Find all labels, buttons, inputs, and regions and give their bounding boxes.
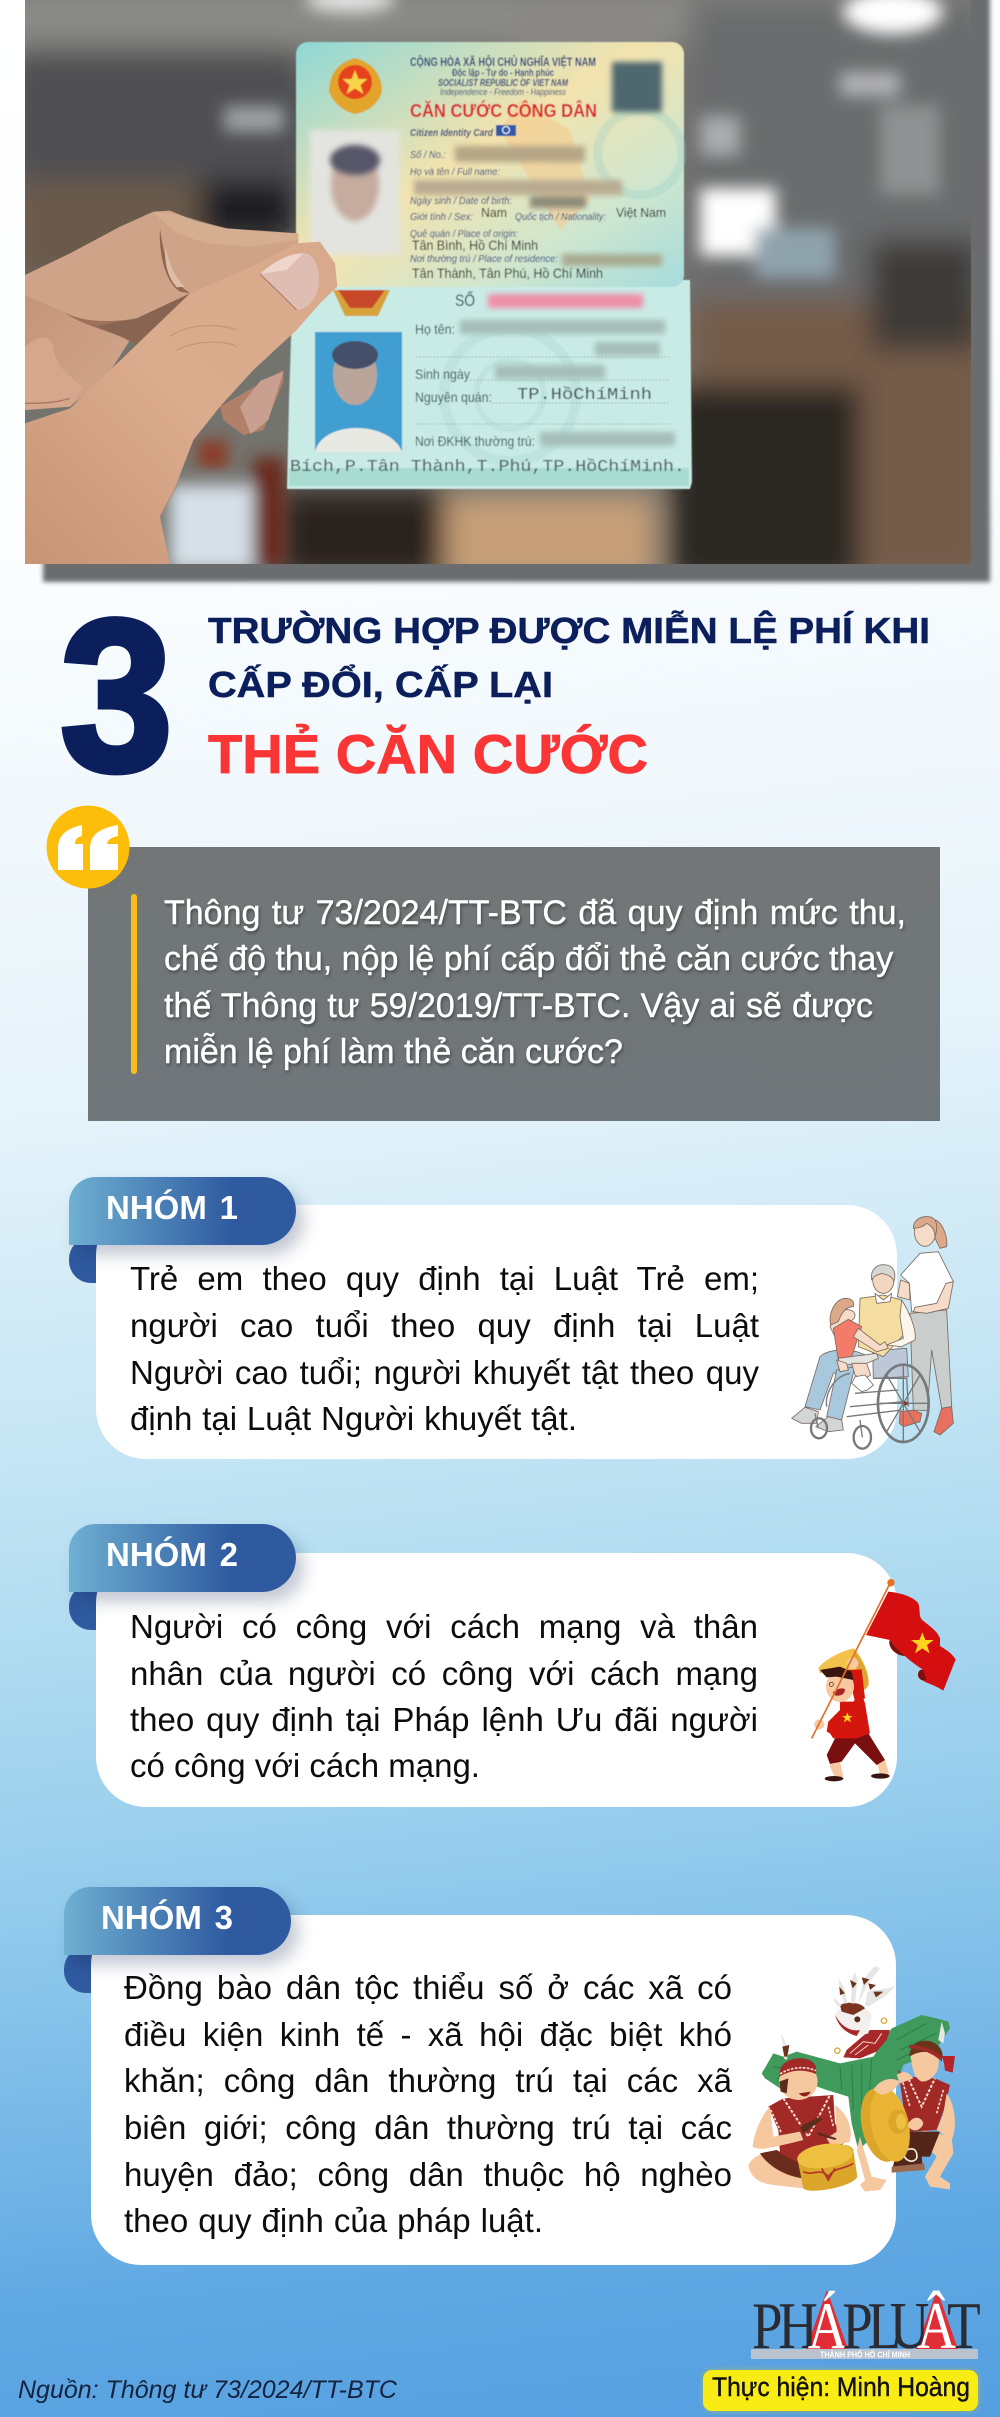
front card: Ngày sinh / Date of birth:: [410, 196, 512, 207]
white card: [96, 1205, 897, 1459]
title line 2: CẤP ĐỔI, CẤP LẠI: [208, 662, 553, 705]
panel: group 2: [69, 1524, 956, 1807]
white card: [96, 1553, 897, 1807]
logo: Pháp Luật: T: [947, 2289, 981, 2363]
front card: Họ và tên / Full name:: [410, 167, 500, 178]
front card: [296, 42, 684, 287]
group 3 text: điều kiện kinh tế - xã hội đặc biệt khó: [124, 2016, 732, 2053]
logo: Pháp Luật: THÀNH PHỐ HỒ CHÍ MINH: [820, 2350, 910, 2360]
front card: Independence - Freedom - Happiness: [440, 87, 566, 97]
intro text: Thông tư 73/2024/TT-BTC đã quy định mức thu,: [164, 894, 906, 932]
group 3 text: huyện đảo; công dân thuộc hộ nghèo: [124, 2156, 732, 2193]
icon: ethnic musicians: [748, 1966, 955, 2192]
back card: Nơi ĐKHK thường trú:: [415, 433, 535, 449]
front card: CỘNG HÒA XÃ HỘI CHỦ NGHĨA VIỆT NAM: [410, 54, 596, 69]
source: Nguồn: Thông tư 73/2024/TT-BTC: [18, 2376, 398, 2404]
intro text: miễn lệ phí làm thẻ căn cước?: [164, 1033, 623, 1071]
front card: Tân Thành, Tân Phú, Hồ Chí Minh: [412, 265, 603, 281]
tab: group 1: [69, 1177, 296, 1245]
logo: Pháp Luật: [751, 2289, 981, 2363]
grey box: [88, 847, 940, 1121]
back card: SỐ: [455, 290, 475, 310]
title line 3: THẺ CĂN CƯỚC: [208, 723, 648, 785]
group 2 text: [130, 1608, 758, 1784]
icon: quote mark: [46, 806, 130, 888]
back card: [287, 280, 692, 489]
group 3 text: Đồng bào dân tộc thiểu số ở các xã có: [124, 1969, 732, 2006]
front card: Độc lập - Tự do - Hạnh phúc: [452, 68, 554, 79]
credit tag: [703, 2370, 978, 2411]
front card: Nam: [481, 205, 507, 220]
tab: group 1: NHÓM 1: [106, 1189, 238, 1226]
group 1 text: định tại Luật Người khuyết tật.: [130, 1400, 577, 1437]
tab: group 3: NHÓM 3: [101, 1899, 233, 1936]
intro text: chế độ thu, nộp lệ phí cấp đổi thẻ căn cước thay: [164, 940, 893, 978]
back card: Bích,P.Tân Thành,T.Phú,TP.HồChíMinh.: [290, 458, 685, 477]
group 3 text: khăn; công dân thường trú tại các xã: [124, 2062, 732, 2099]
big number 3: 3: [60, 574, 173, 816]
panel: intro quote: [46, 806, 940, 1121]
front card: Quê quán / Place of origin:: [410, 229, 518, 240]
front card: Số / No.:: [410, 149, 446, 161]
title: [208, 609, 930, 785]
tab: group 2: [69, 1524, 296, 1592]
group 3 text: theo quy định của pháp luật.: [124, 2202, 543, 2239]
group 3 text: [124, 1969, 732, 2239]
intro text: [164, 894, 906, 1073]
icon: family with wheelchair: [791, 1216, 954, 1450]
group 1 text: [130, 1260, 759, 1437]
group 2 text: theo quy định tại Pháp lệnh Ưu đãi người: [130, 1701, 758, 1738]
front card: Giới tính / Sex:: [410, 212, 473, 223]
photo shadow: [43, 0, 990, 582]
front card: CĂN CƯỚC CÔNG DÂN: [410, 100, 597, 121]
logo: Pháp Luật: PLU: [842, 2289, 929, 2363]
front card: Việt Nam: [616, 205, 666, 220]
accent bar: [131, 894, 137, 1074]
icon: child with flag: [811, 1579, 956, 1782]
group 1 text: Trẻ em theo quy định tại Luật Trẻ em;: [130, 1260, 759, 1297]
front card: Nơi thường trú / Place of residence:: [410, 254, 558, 265]
back card: TP.HồChíMinh: [517, 386, 652, 405]
tab: group 3: [64, 1887, 291, 1955]
front card: Quốc tịch / Nationality:: [515, 211, 606, 223]
white card: [91, 1915, 896, 2265]
logo: Pháp Luật: Á: [808, 2289, 847, 2363]
logo: Pháp Luật: Ậ: [917, 2289, 956, 2363]
title line 1: TRƯỜNG HỢP ĐƯỢC MIỄN LỆ PHÍ KHI: [208, 609, 930, 651]
hand: [25, 211, 337, 565]
ribbon fold: [69, 1584, 109, 1630]
group 2 text: có công với cách mạng.: [130, 1747, 480, 1784]
panel: group 1: [69, 1177, 954, 1459]
group 2 text: nhân của người có công với cách mạng: [130, 1655, 758, 1692]
front card: Citizen Identity Card: [410, 128, 494, 139]
group 1 text: Người cao tuổi; người khuyết tật theo quy: [130, 1354, 759, 1391]
ribbon fold: [69, 1237, 109, 1283]
logo: Pháp Luật: PH: [752, 2289, 818, 2363]
front card: Tân Bình, Hồ Chí Minh: [412, 237, 538, 253]
back card: Nguyên quán:: [415, 389, 492, 405]
ribbon fold: [64, 1947, 104, 1993]
tab: group 2: NHÓM 2: [106, 1536, 238, 1573]
back card: Sinh ngày: [415, 366, 470, 382]
group 3 text: biên giới; công dân thường trú tại các: [124, 2109, 732, 2146]
group 2 text: Người có công với cách mạng và thân: [130, 1608, 758, 1645]
panel: group 3: [64, 1887, 955, 2265]
intro text: thế Thông tư 59/2019/TT-BTC. Vậy ai sẽ được: [164, 987, 873, 1025]
photo: hand holding ID cards: [25, 0, 971, 564]
front card: SOCIALIST REPUBLIC OF VIET NAM: [438, 78, 568, 89]
credit tag: Thực hiện: Minh Hoàng: [712, 2372, 970, 2402]
group 1 text: người cao tuổi theo quy định tại Luật: [130, 1307, 759, 1344]
back card: Họ tên:: [415, 321, 455, 337]
